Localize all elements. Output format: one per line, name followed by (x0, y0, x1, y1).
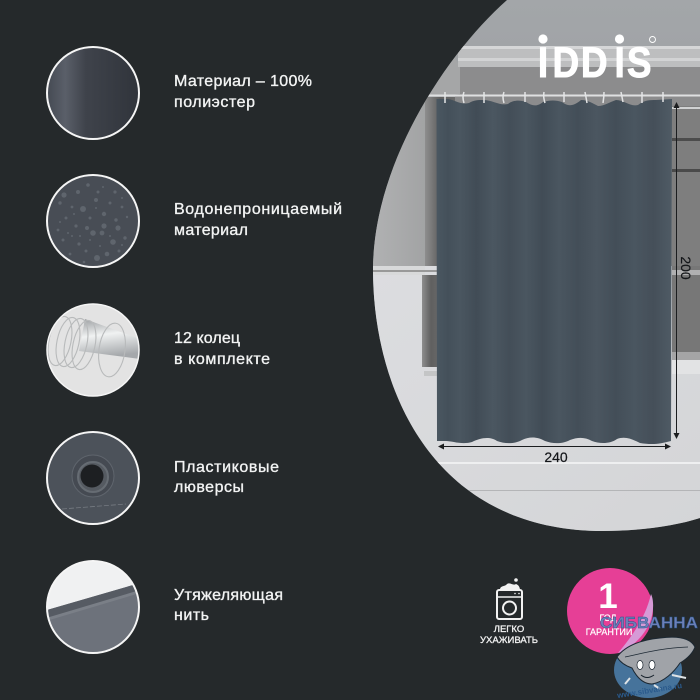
curtain (436, 99, 672, 444)
text: waterproof: материал (174, 222, 248, 239)
watermark: SibVanna mascot (614, 637, 695, 700)
text: rings: 12 колец (174, 330, 240, 347)
icon: water drops (47, 175, 139, 267)
dimension arrow: width (438, 444, 671, 450)
text: rings (174, 330, 270, 368)
text: eyelets (174, 459, 279, 496)
dimension label: 200: 200 (678, 256, 694, 280)
text: material: Материал – 100% (174, 73, 312, 90)
dimension label: 240: 240 (544, 449, 568, 465)
text: easy care: УХАЖИВАТЬ (480, 635, 538, 646)
text: weighted thread: Утяжеляющая (174, 587, 283, 604)
text: eyelets: люверсы (174, 479, 244, 496)
text: material (174, 73, 312, 111)
curtain rod (427, 94, 700, 96)
icon: rings on rod (44, 304, 140, 396)
icon: weighted thread (46, 560, 140, 654)
watermark: SibVanna text: СИБВАННА (600, 615, 698, 632)
text: waterproof (174, 201, 342, 239)
dimension arrow: height (674, 102, 680, 439)
watermark: SibVanna mascot: www.sibvanna.ru (616, 681, 683, 700)
text: material: полиэстер (174, 94, 255, 111)
text: weighted thread (174, 587, 283, 624)
text: eyelets: Пластиковые (174, 459, 279, 476)
badge: warranty: 1 (598, 577, 618, 616)
badge: warranty (567, 568, 653, 654)
text: easy care (480, 624, 538, 646)
icon: plastic eyelet (47, 432, 139, 524)
logo: IDDIS: IDDIS (538, 39, 652, 87)
badge: warranty: ГОД (600, 613, 616, 623)
icon: material fabric (47, 47, 139, 139)
text: waterproof: Водонепроницаемый (174, 201, 342, 218)
badge: warranty: ГАРАНТИИ (586, 627, 632, 637)
icon: washing machine (497, 578, 522, 619)
curtain rings (445, 92, 663, 103)
text: rings: в комплекте (174, 351, 270, 368)
text: easy care: ЛЕГКО (494, 624, 524, 635)
text: weighted thread: нить (174, 607, 209, 624)
photo: bathroom with curtain (360, 0, 700, 540)
